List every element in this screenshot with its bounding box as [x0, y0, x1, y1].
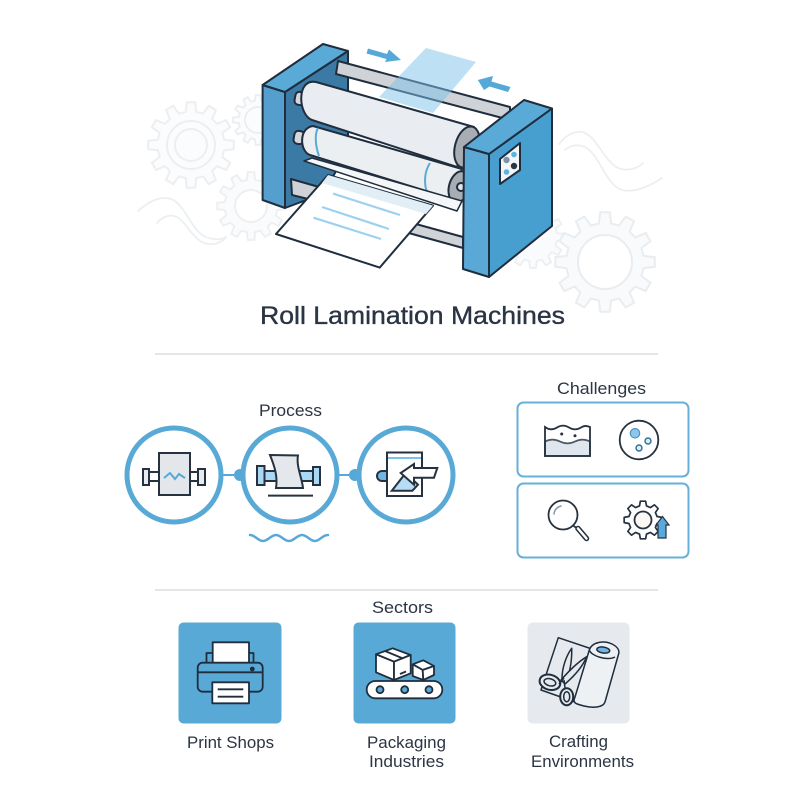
icon: printer: [198, 642, 263, 703]
icon: magnifier: [548, 500, 586, 538]
icon: gear with up arrow: [624, 501, 669, 539]
translucent film: [379, 48, 476, 113]
sector: crafting environments: [528, 622, 634, 771]
sectors heading: Sectors: [372, 598, 433, 617]
control panel: [500, 143, 520, 184]
right housing top face: [464, 100, 552, 154]
divider: [155, 353, 658, 355]
icon: boxes on conveyor: [367, 648, 442, 698]
panel: challenges bottom: [518, 484, 688, 558]
right housing side face: [489, 108, 552, 277]
wave line: [250, 535, 328, 541]
lower roller end cap: [445, 169, 473, 205]
machine illustration: [263, 44, 552, 277]
film under rollers: [304, 158, 462, 211]
upper roller end cap: [450, 124, 484, 170]
lower rear rod: [291, 179, 326, 201]
feed arrow: right: [478, 76, 510, 92]
feed arrow: left: [366, 48, 401, 62]
upper roller: [301, 82, 474, 167]
title: Roll Lamination Machines: [260, 302, 565, 330]
sector: print shops: [178, 622, 282, 752]
label: Crafting: [549, 733, 608, 751]
divider: [155, 589, 658, 591]
icon: bubbles: [620, 421, 658, 459]
left housing inner wall: [285, 51, 348, 208]
sector: packaging industries: [354, 622, 456, 771]
icon: water level: [545, 426, 590, 456]
lower roller: [302, 126, 462, 199]
label: Packaging: [367, 734, 446, 752]
label: Environments: [531, 753, 634, 771]
roller axle stubs: [294, 91, 306, 106]
step 3: finished output: [359, 428, 453, 522]
icon: film roll and scissors: [538, 638, 619, 707]
panel: challenges top: [518, 402, 688, 476]
step 2: lamination: [243, 428, 337, 522]
background gears and waves: [138, 95, 662, 312]
output sheet: [276, 175, 433, 268]
upper rear rod: [336, 61, 510, 120]
left housing front face: [263, 85, 285, 208]
connectors: [220, 469, 361, 481]
process flow: [127, 428, 453, 541]
process heading: Process: [259, 401, 322, 420]
label: Industries: [369, 753, 444, 771]
right housing front face: [463, 147, 489, 277]
step 1: heating: [127, 428, 221, 522]
label: Print Shops: [187, 734, 274, 752]
challenges heading: Challenges: [557, 379, 646, 398]
left housing top face: [263, 44, 348, 92]
sheet text lines: [314, 194, 400, 239]
